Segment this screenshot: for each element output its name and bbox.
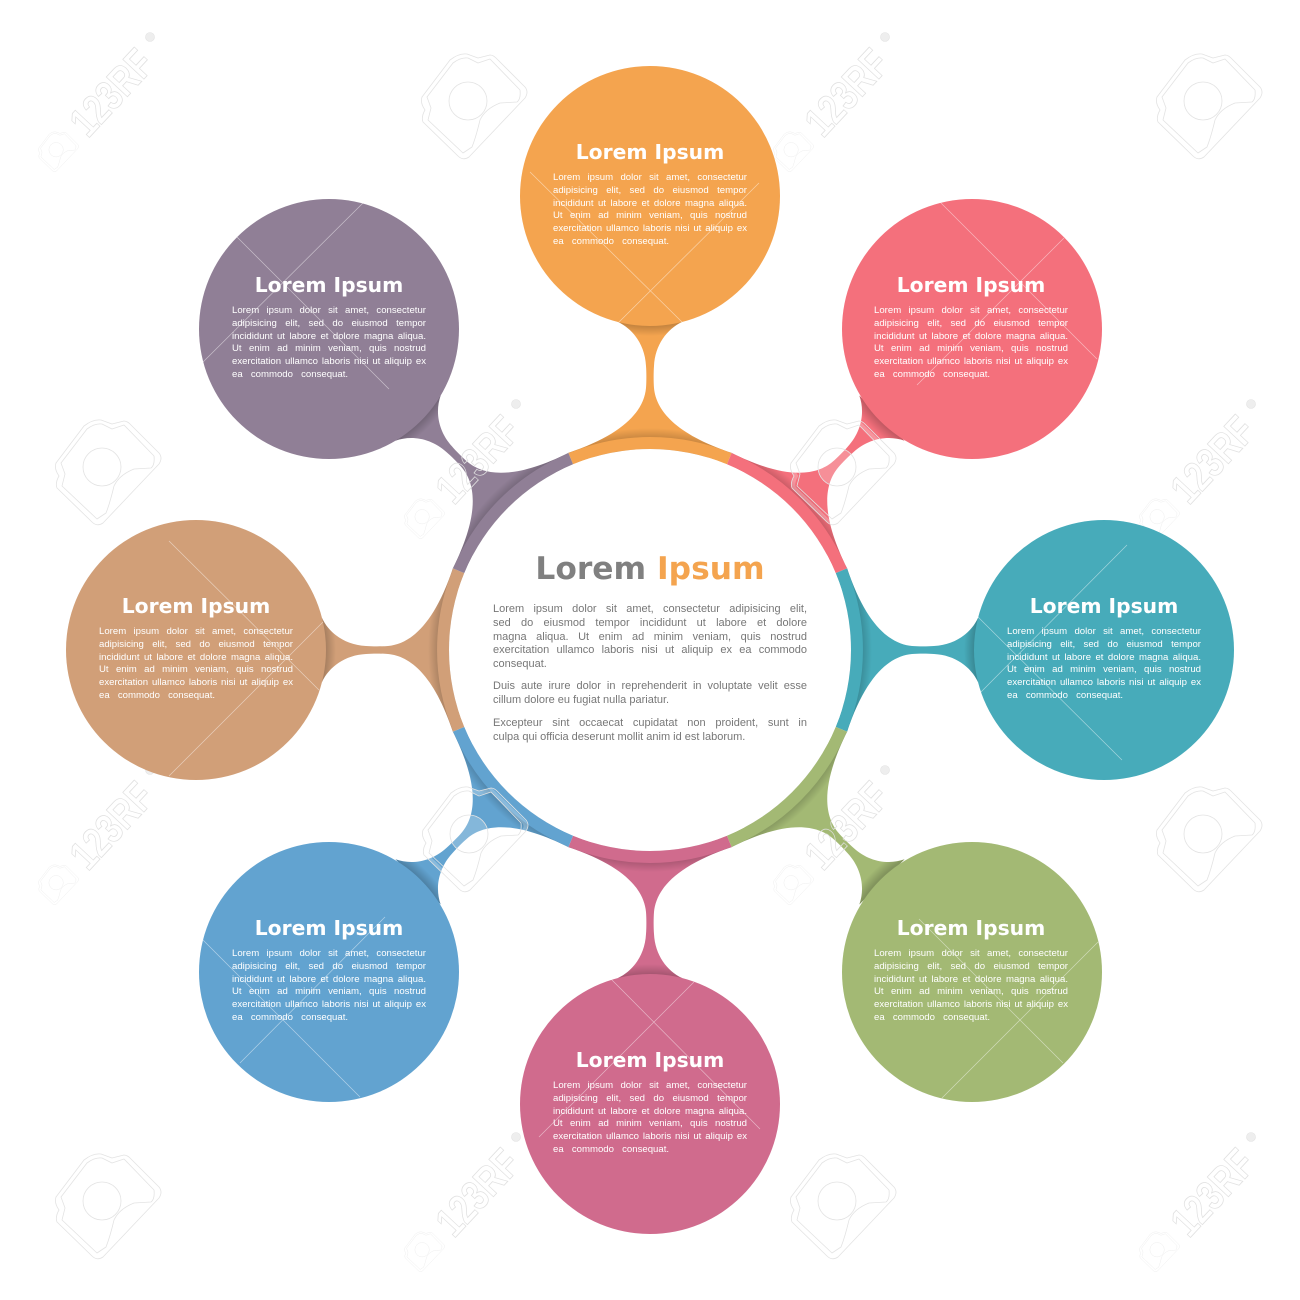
body text: Lorem ipsum dolor sit amet, consectetur (1007, 626, 1201, 637)
body text: Ut enim ad minim veniam, quis nostrud (232, 986, 426, 997)
body text: exercitation ullamco laboris nisi ut aliquip ex (232, 999, 426, 1010)
watermark: 123RF: 123RF (60, 773, 163, 878)
bubble: orange (520, 66, 780, 326)
text block: purple bubble (232, 273, 426, 380)
body text (1007, 626, 1201, 701)
body text: incididunt ut labore et dolore magna aliqua. (99, 652, 293, 663)
body text (553, 172, 747, 247)
connector: red (719, 360, 940, 581)
heading: Lorem Ipsum (576, 140, 724, 164)
body text: incididunt ut labore et dolore magna aliqua. (1007, 652, 1201, 663)
text block: orange bubble (553, 140, 747, 247)
watermark: 123RF: 123RF (795, 773, 898, 878)
text block: tan bubble (99, 594, 293, 701)
text block: magenta bubble (553, 1048, 747, 1155)
body text: Ut enim ad minim veniam, quis nostrud (99, 664, 293, 675)
body text: exercitation ullamco laboris nisi ut aliquip ex (553, 223, 747, 234)
body text: Ut enim ad minim veniam, quis nostrud (553, 210, 747, 221)
heading: Lorem Ipsum (897, 273, 1045, 297)
body text: ea commodo consequat. (553, 1144, 669, 1155)
central paragraphs: Lorem ipsum dolor sit amet, consectetur adipisicing elit, (493, 603, 807, 615)
body text: exercitation ullamco laboris nisi ut aliquip ex (99, 677, 293, 688)
body text: ea commodo consequat. (1007, 690, 1123, 701)
text block: red bubble (874, 273, 1068, 380)
body text: Lorem ipsum dolor sit amet, consectetur (874, 948, 1068, 959)
watermark: 123RF: 123RF (60, 40, 163, 145)
text block: blue bubble (232, 916, 426, 1023)
body text: adipisicing elit, sed do eiusmod tempor (1007, 639, 1201, 650)
body text: Ut enim ad minim veniam, quis nostrud (553, 1118, 747, 1129)
body text: Lorem ipsum dolor sit amet, consectetur (232, 305, 426, 316)
heading: Lorem Ipsum (576, 1048, 724, 1072)
connector: magenta (568, 830, 732, 978)
watermark: 123RF (38, 32, 163, 172)
body text: incididunt ut labore et dolore magna aliqua. (553, 1106, 747, 1117)
connector: purple (360, 360, 581, 581)
central paragraphs: Duis aute irure dolor in reprehenderit in voluptate velit esse (493, 680, 807, 692)
watermark icon (1156, 787, 1262, 892)
text block: green bubble (874, 916, 1068, 1023)
heading: Lorem Ipsum (255, 273, 403, 297)
body text: ea commodo consequat. (232, 1012, 348, 1023)
bubble: green (842, 842, 1102, 1102)
body text: Lorem ipsum dolor sit amet, consectetur (874, 305, 1068, 316)
body text: adipisicing elit, sed do eiusmod tempor (232, 318, 426, 329)
central title: Lorem Ipsum (535, 551, 765, 587)
body text: exercitation ullamco laboris nisi ut aliquip ex (1007, 677, 1201, 688)
body text: exercitation ullamco laboris nisi ut aliquip ex (874, 356, 1068, 367)
body text (553, 1080, 747, 1155)
central paragraphs: magna aliqua. Ut enim ad minim veniam, quis nostrud (493, 631, 807, 643)
body text: Lorem ipsum dolor sit amet, consectetur (553, 172, 747, 183)
body text (232, 305, 426, 380)
heading: Lorem Ipsum (122, 594, 270, 618)
bubble: purple (199, 199, 459, 459)
text block: teal bubble (1007, 594, 1201, 701)
body text: incididunt ut labore et dolore magna aliqua. (553, 198, 747, 209)
watermark icon (790, 1154, 896, 1259)
connectors: necks and ring segments (322, 322, 978, 978)
watermark icon (55, 420, 161, 525)
central white circle (449, 449, 851, 851)
watermark icon (421, 54, 527, 159)
connector: tan (322, 568, 470, 732)
watermark: 123RF (1139, 400, 1264, 539)
body text: incididunt ut labore et dolore magna aliqua. (874, 331, 1068, 342)
body text: Ut enim ad minim veniam, quis nostrud (874, 343, 1068, 354)
bubble: tan (66, 520, 326, 780)
bubble: blue (199, 842, 459, 1102)
body text: ea commodo consequat. (553, 236, 669, 247)
body text: exercitation ullamco laboris nisi ut aliquip ex (232, 356, 426, 367)
watermark: 123RF (404, 1132, 529, 1272)
heading: Lorem Ipsum (1030, 594, 1178, 618)
body text: Ut enim ad minim veniam, quis nostrud (1007, 664, 1201, 675)
body text: Lorem ipsum dolor sit amet, consectetur (232, 948, 426, 959)
body text: adipisicing elit, sed do eiusmod tempor (232, 961, 426, 972)
body text: incididunt ut labore et dolore magna aliqua. (232, 974, 426, 985)
watermark: 123RF: 123RF (795, 40, 898, 145)
watermark: 123RF: 123RF (1161, 1140, 1264, 1245)
body text: adipisicing elit, sed do eiusmod tempor (874, 318, 1068, 329)
body text: incididunt ut labore et dolore magna aliqua. (874, 974, 1068, 985)
heading: Lorem Ipsum (255, 916, 403, 940)
body text: Ut enim ad minim veniam, quis nostrud (874, 986, 1068, 997)
body text (874, 305, 1068, 380)
body text: Ut enim ad minim veniam, quis nostrud (232, 343, 426, 354)
watermark: 123RF: 123RF (426, 407, 529, 512)
central paragraphs: Excepteur sint occaecat cupidatat non proident, sunt in (493, 717, 807, 729)
body text: Lorem ipsum dolor sit amet, consectetur (553, 1080, 747, 1091)
watermark: 123RF (773, 32, 898, 172)
body text: adipisicing elit, sed do eiusmod tempor (553, 1093, 747, 1104)
watermark icon (422, 787, 528, 892)
body text: adipisicing elit, sed do eiusmod tempor (874, 961, 1068, 972)
body text: exercitation ullamco laboris nisi ut aliquip ex (553, 1131, 747, 1142)
body text: ea commodo consequat. (874, 1012, 990, 1023)
watermark: 123RF (773, 766, 898, 905)
body text: exercitation ullamco laboris nisi ut aliquip ex (874, 999, 1068, 1010)
watermark icon (790, 420, 896, 525)
central paragraphs (493, 603, 807, 743)
heading: Lorem Ipsum (897, 916, 1045, 940)
watermark: 123RF: 123RF (426, 1140, 529, 1245)
body text: Lorem ipsum dolor sit amet, consectetur (99, 626, 293, 637)
central text block (493, 551, 807, 743)
connector: green (719, 719, 940, 940)
body text (232, 948, 426, 1023)
body text: ea commodo consequat. (232, 369, 348, 380)
body text (874, 948, 1068, 1023)
watermark: 123RF (1139, 1132, 1264, 1272)
central paragraphs: sed do eiusmod tempor incididunt ut labore et dolore (493, 617, 807, 629)
connector: teal (830, 568, 978, 732)
central paragraphs: exercitation ullamco laboris nisi ut aliquip ex ea commodo (493, 644, 807, 656)
body text: incididunt ut labore et dolore magna aliqua. (232, 331, 426, 342)
central paragraphs: cillum dolore eu fugiat nulla pariatur. (493, 694, 669, 706)
connector: orange (568, 322, 732, 470)
bubble: red (842, 199, 1102, 459)
watermark: 123RF (38, 766, 163, 905)
watermark highlights over connectors (424, 421, 894, 890)
bubble: magenta (520, 974, 780, 1234)
connector: blue (360, 719, 581, 940)
watermark icon (1156, 54, 1262, 159)
watermark: 123RF (404, 400, 529, 539)
body text: adipisicing elit, sed do eiusmod tempor (99, 639, 293, 650)
body text: ea commodo consequat. (874, 369, 990, 380)
watermark icon (55, 1154, 161, 1259)
body text (99, 626, 293, 701)
body text: adipisicing elit, sed do eiusmod tempor (553, 185, 747, 196)
body text: ea commodo consequat. (99, 690, 215, 701)
central paragraphs: consequat. (493, 658, 547, 670)
bubble: teal (974, 520, 1234, 780)
central paragraphs: culpa qui officia deserunt mollit anim id est laborum. (493, 731, 745, 743)
watermark: 123RF: 123RF (1161, 407, 1264, 512)
